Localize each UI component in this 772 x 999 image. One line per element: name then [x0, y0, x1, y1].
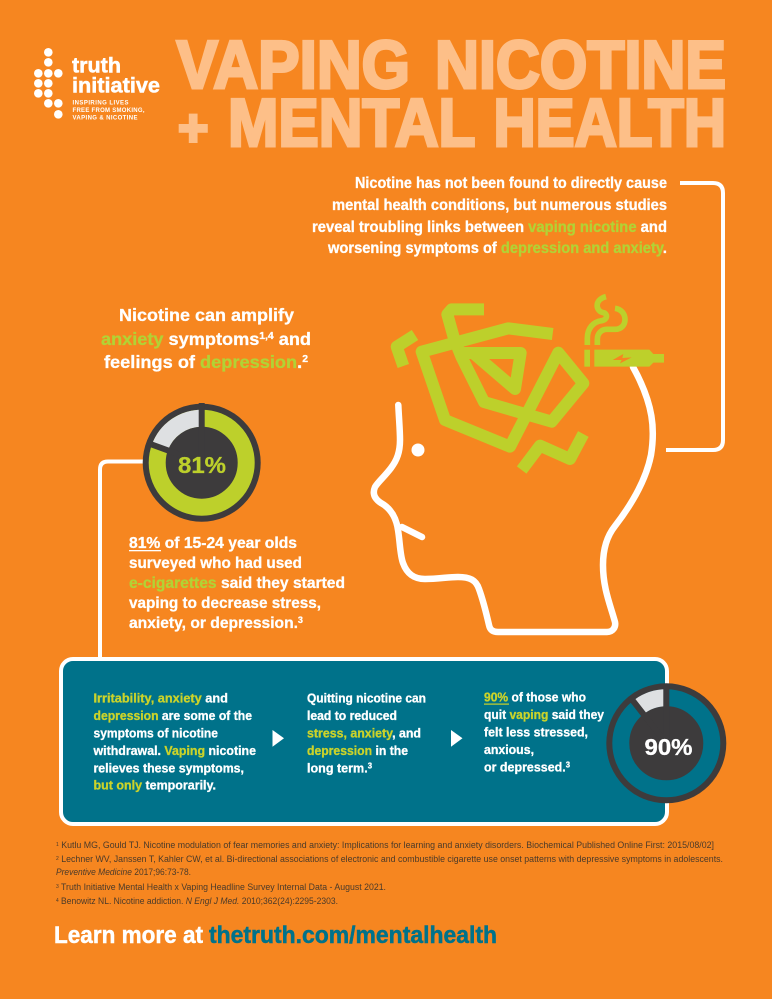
illustration: head outline: [374, 367, 653, 632]
footnotes: Truth Initiative Mental Health x Vaping Headline Survey Internal Data - August 2021.: [59, 882, 386, 892]
text: 90% statistic: felt less stressed,: [484, 724, 588, 740]
heading: nicotine amplify: feelings of depression.: [104, 352, 302, 372]
call to action: [54, 922, 497, 949]
text: 81% statistic: anxiety, or depression.: [129, 615, 297, 632]
connector: donut to panel: [100, 462, 150, 660]
footnotes: 2: [56, 856, 59, 862]
text: withdrawal: [93, 691, 256, 792]
text: withdrawal: symptoms of nicotine: [94, 726, 218, 740]
donut chart: 81%: [143, 403, 261, 522]
icon: head eye: [412, 444, 424, 456]
text: quitting: [307, 691, 426, 775]
text: 90% statistic: or depressed.: [484, 759, 569, 774]
heading: nicotine amplify: and: [274, 329, 311, 349]
text: 81% statistic: [129, 535, 345, 632]
text: withdrawal: relieves these symptoms,: [94, 760, 244, 775]
footnotes: N Engl J Med. 2010;362(24):2295-2303.: [186, 896, 341, 906]
icon: vape with smoke: [584, 297, 664, 367]
title: NICOTINE: [435, 28, 726, 103]
text: 90% statistic: 3: [566, 760, 571, 769]
text: 90% statistic: 90% of those who: [484, 690, 586, 704]
text: 90% statistic: anxious,: [484, 742, 534, 757]
text: 81% statistic: 81% of 15-24 year olds: [129, 535, 297, 552]
footnotes: Benowitz NL. Nicotine addiction.: [59, 896, 186, 906]
heading: nicotine amplify: Nicotine can amplify: [119, 305, 294, 325]
logo: Truth Initiative: truth: [72, 54, 121, 78]
heading: nicotine amplify: 1,4: [259, 331, 274, 342]
text: 81% statistic: surveyed who had used: [129, 555, 302, 572]
footnotes: [56, 840, 723, 906]
panel: nicotine withdrawal: [61, 659, 667, 824]
footnotes: Kutlu MG, Gould TJ. Nicotine modulation of fear memories and anxiety: Implications for learning and anxiety disorders. Biochemical Published Online First: 2015/08/02]: [59, 840, 714, 850]
footnotes: 1: [56, 842, 59, 848]
heading: nicotine amplify: anxiety symptoms: [101, 329, 256, 349]
text: withdrawal: depression are some of the: [94, 708, 252, 723]
text: withdrawal: withdrawal. Vaping nicotine: [93, 743, 256, 758]
title: VAPING: [176, 28, 410, 103]
heading: nicotine amplify: 2: [302, 354, 308, 365]
intro text: [312, 175, 667, 257]
text: 90% statistic: quit vaping said they: [484, 707, 605, 722]
title: [176, 28, 726, 161]
text: 81% statistic: vaping to decrease stress,: [129, 595, 321, 612]
footnotes: 3: [56, 884, 59, 890]
footnotes: Lechner WV, Janssen T, Kahler CW, et al. Bi-directional associations of electronic and combustible cigarette use onset patterns with depressive symptoms in adolescents.: [59, 854, 723, 864]
arrow: to result: [451, 730, 462, 747]
call to action: Learn more at: [54, 922, 203, 949]
text: withdrawal: but only temporarily.: [94, 778, 216, 792]
donut chart: 90%: 90%: [644, 734, 692, 760]
title: HEALTH: [494, 86, 726, 161]
intro text: worsening symptoms of depression and anxiety.: [327, 240, 667, 257]
intro text: mental health conditions, but numerous studies: [332, 197, 667, 214]
text: quitting: 3: [368, 761, 373, 770]
footnotes: Preventive Medicine 2017;96:73-78.: [56, 867, 191, 877]
logo: Truth Initiative: VAPING & NICOTINE: [72, 116, 138, 122]
intro text: Nicotine has not been found to directly cause: [355, 175, 667, 192]
text: 81% statistic: 3: [298, 615, 303, 625]
text: 90% statistic: [484, 690, 605, 774]
logo: Truth Initiative: INSPIRING LIVES: [72, 100, 128, 106]
footnotes: 4: [56, 898, 59, 904]
logo: Truth Initiative: initiative: [72, 74, 160, 98]
text: quitting: lead to reduced: [307, 708, 397, 723]
text: withdrawal: Irritability, anxiety and: [94, 691, 228, 706]
text: quitting: long term.: [307, 760, 370, 775]
text: quitting: stress, anxiety, and: [307, 726, 421, 740]
connector: intro bracket to head: [666, 183, 723, 450]
donut chart: 81%: 81%: [178, 452, 226, 478]
heading: nicotine amplify: [101, 305, 311, 372]
call to action: thetruth.com/mentalhealth: [209, 922, 497, 949]
intro text: reveal troubling links between vaping nicotine and: [312, 219, 667, 236]
illustration: tangled brain lines: [397, 309, 583, 470]
text: quitting: depression in the: [307, 743, 408, 758]
donut chart: 90%: [606, 683, 726, 803]
logo: Truth Initiative: [34, 48, 160, 122]
title: +: [178, 100, 208, 158]
title: MENTAL: [228, 86, 476, 161]
text: quitting: Quitting nicotine can: [307, 691, 426, 706]
text: 81% statistic: e-cigarettes said they started: [129, 575, 345, 592]
arrow: to quitting: [272, 730, 284, 747]
logo: Truth Initiative: FREE FROM SMOKING,: [72, 108, 145, 114]
